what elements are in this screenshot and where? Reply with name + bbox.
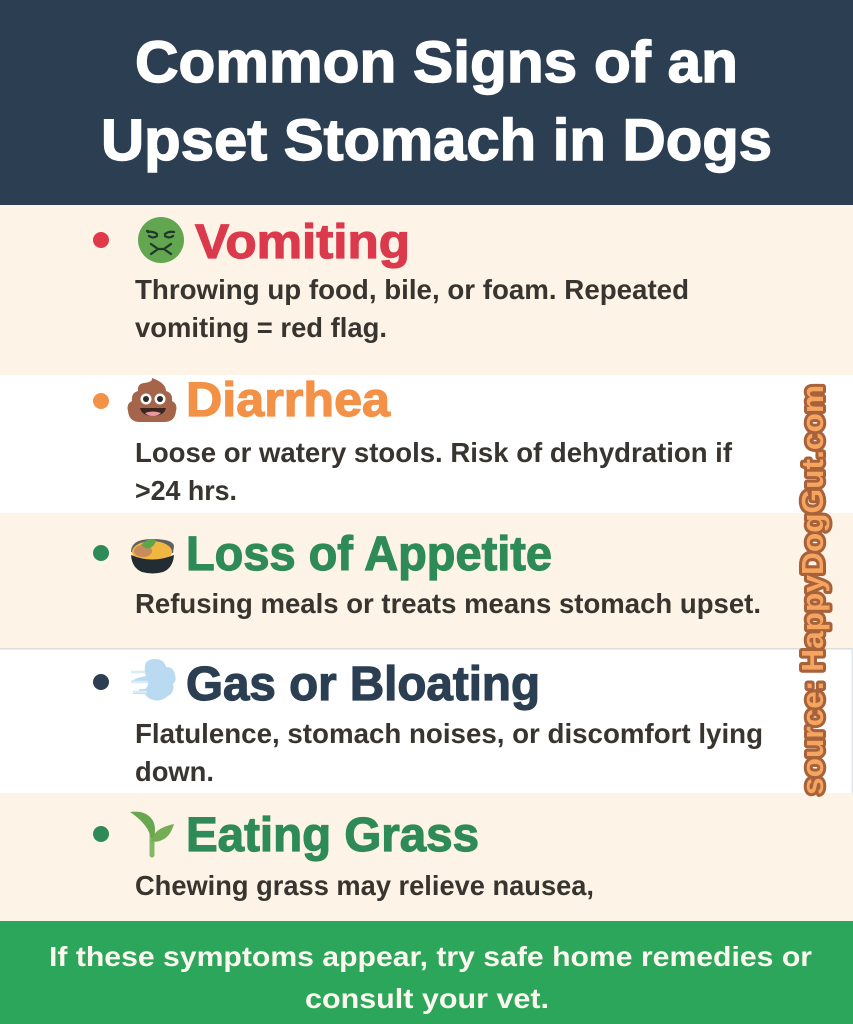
icon: nauseated face — [138, 217, 184, 263]
text: vomiting description: vomiting = red flag. — [135, 312, 387, 343]
icon: wind puff — [131, 659, 176, 700]
panel: title header — [0, 0, 853, 205]
title: Common Signs of an — [135, 30, 738, 95]
text: diarrhea description: Loose or watery stools. Risk of dehydration if — [135, 437, 733, 468]
text: diarrhea description — [135, 437, 733, 506]
text: gas or bloating description: down. — [135, 756, 214, 787]
panel: gas or bloating — [0, 648, 853, 793]
panel: eating grass — [0, 793, 853, 921]
icon: poop — [128, 378, 176, 422]
bullet: vomiting — [93, 232, 109, 248]
bullet: eating grass — [93, 826, 109, 842]
text: loss of appetite description: Refusing meals or treats means stomach upset. — [135, 588, 761, 619]
heading: gas or bloating: Gas or Bloating — [186, 658, 540, 711]
text: vomiting description — [135, 274, 689, 343]
bullet: diarrhea — [93, 393, 109, 409]
icon: bowl of food — [131, 539, 174, 574]
panel: vomiting — [0, 205, 853, 375]
text: vomiting description: Throwing up food, bile, or foam. Repeated — [135, 274, 689, 305]
panel: loss of appetite — [0, 513, 853, 648]
panel: diarrhea — [0, 374, 853, 513]
heading: diarrhea: Diarrhea — [186, 374, 390, 427]
bullet: loss of appetite — [93, 545, 109, 561]
text: footer message: If these symptoms appear, try safe home remedies or — [49, 941, 812, 972]
text: gas or bloating description — [135, 718, 763, 787]
bullet: gas or bloating — [93, 674, 109, 690]
title — [101, 30, 772, 173]
text: diarrhea description: >24 hrs. — [135, 475, 237, 506]
icon: seedling — [130, 812, 174, 855]
heading: loss of appetite: Loss of Appetite — [186, 528, 552, 581]
panel: footer call to action — [0, 921, 853, 1024]
heading: eating grass: Eating Grass — [186, 809, 479, 862]
heading: vomiting: Vomiting — [195, 216, 410, 269]
text: gas or bloating description: Flatulence, stomach noises, or discomfort lying — [135, 718, 763, 749]
text: footer message: consult your vet. — [305, 983, 549, 1014]
text: eating grass description: Chewing grass may relieve nausea, — [135, 870, 594, 901]
title: Upset Stomach in Dogs — [101, 108, 772, 173]
text: footer message — [49, 941, 812, 1014]
source watermark: source: HappyDogGut.com — [795, 385, 830, 795]
